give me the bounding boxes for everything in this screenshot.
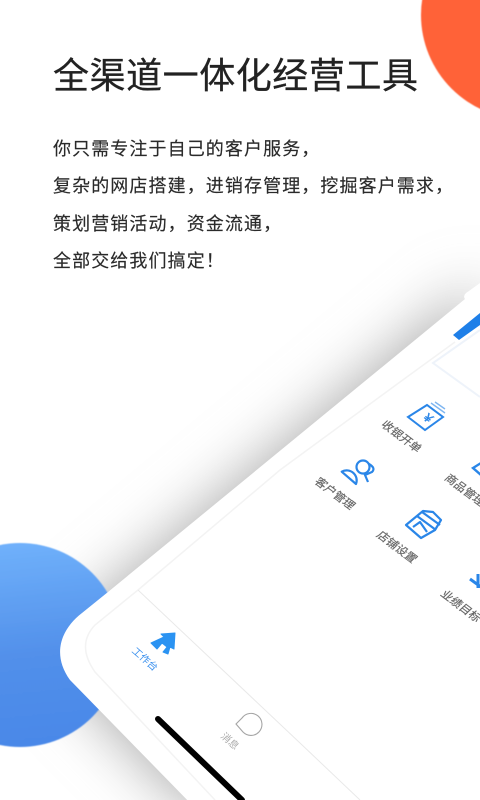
- phone mockup: [60, 283, 480, 800]
- label: cash register: 收银开单: [378, 418, 425, 455]
- icon: store settings: [406, 511, 441, 538]
- icon: message tab: [236, 713, 262, 735]
- blue status bar: [453, 313, 480, 340]
- body text: [53, 138, 454, 271]
- icon: cash register: ¥: [419, 410, 437, 426]
- icon: performance goal: [470, 574, 480, 588]
- label: message tab: 消息: [218, 730, 242, 752]
- label: store settings: 店铺设置: [374, 528, 420, 566]
- label: home tab: 工作台: [129, 645, 161, 673]
- icon: cash register: [408, 402, 445, 430]
- decorative circle: orange: [421, 0, 480, 119]
- body text: 策划营销活动，资金流通，: [53, 214, 282, 234]
- icon: goods management: [473, 463, 480, 475]
- body text: 全部交给我们搞定！: [53, 251, 225, 271]
- phone shadow: [63, 283, 480, 800]
- label: customer management: 客户管理: [312, 475, 359, 512]
- icon: customer management: [342, 460, 373, 484]
- body text: 复杂的网店搭建，进销存管理，挖掘客户需求，: [53, 176, 454, 196]
- decorative circle: blue: [0, 543, 122, 747]
- phone body: [60, 283, 480, 800]
- title: 全渠道一体化经营工具: [53, 55, 419, 96]
- icon: home tab: [151, 633, 175, 654]
- tab bar divider: [138, 590, 360, 800]
- body text: 你只需专注于自己的客户服务，: [53, 138, 320, 158]
- phone screen border: [86, 342, 455, 800]
- home indicator: [158, 719, 242, 800]
- white card: [433, 330, 480, 397]
